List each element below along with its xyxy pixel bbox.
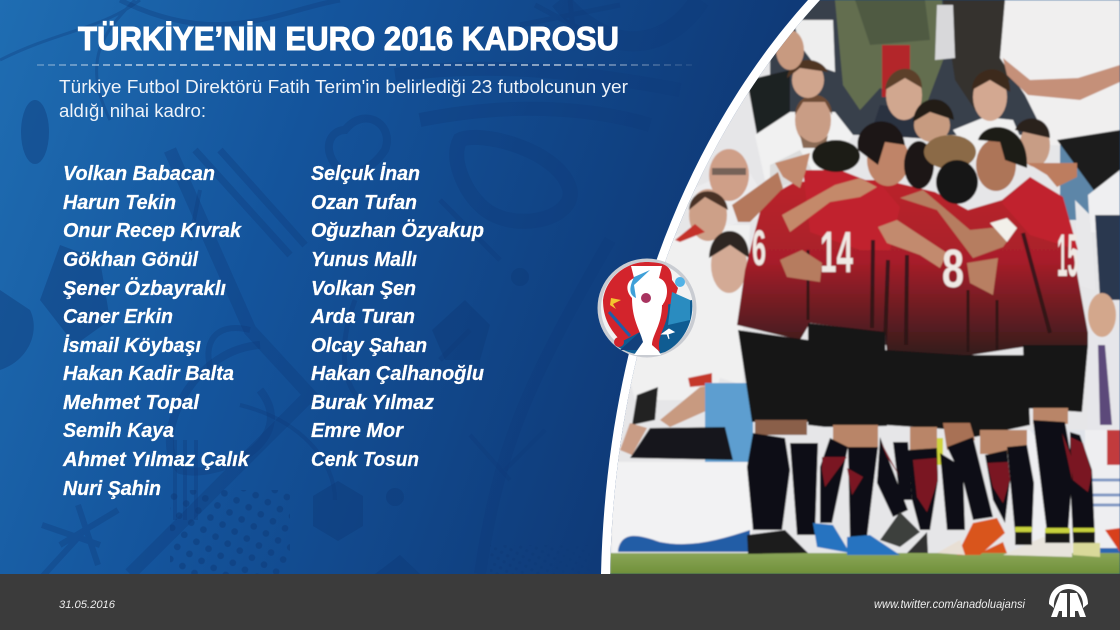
players: shirt numbers [752, 228, 1078, 289]
dashed divider [37, 64, 692, 66]
players: shirt numbers: 14 [820, 220, 853, 285]
player list: left column: Şener Özbayraklı [63, 277, 226, 300]
players: legs and socks [747, 408, 1095, 540]
title: TÜRKİYE’NİN EURO 2016 KADROSU [78, 20, 619, 57]
players: shirt numbers: 8 [942, 239, 964, 299]
player list: left column: Onur Recep Kıvrak [63, 220, 242, 242]
player list: right column: Cenk Tosun [311, 449, 419, 471]
player list: right column: Burak Yılmaz [311, 392, 434, 414]
player list: right column: Ozan Tufan [311, 192, 417, 214]
players: jerseys [737, 170, 1088, 356]
player list: left column: Harun Tekin [63, 192, 176, 214]
player list: right column: Emre Mor [311, 420, 404, 442]
player list: right column: Arda Turan [310, 306, 415, 328]
player list: right column: Olcay Şahan [311, 335, 427, 357]
player list: left column [62, 163, 250, 500]
player list: left column: Volkan Babacan [63, 163, 215, 185]
icon: Anadolu Agency logo [1049, 584, 1088, 617]
player list: left column: Gökhan Gönül [63, 249, 198, 271]
jersey straps and folds [808, 233, 1050, 352]
player list: right column: Hakan Çalhanoğlu [311, 363, 484, 385]
intro text: aldığı nihai kadro: [59, 101, 206, 121]
spectators in the stands [620, 0, 1120, 463]
intro text: Türkiye Futbol Direktörü Fatih Terim'in belirlediği 23 futbolcunun yer [59, 77, 628, 97]
white curved band [601, 0, 820, 574]
players: shirt numbers: 0 [955, 377, 971, 408]
date: 31.05.2016 [59, 599, 116, 611]
background panel [0, 0, 820, 590]
footer bar [0, 574, 1120, 630]
players: boots [747, 512, 1120, 557]
player list: right column: Volkan Şen [311, 278, 416, 300]
photo: Turkish team huddle in front of the crowd [600, 0, 1120, 574]
player list: left column: Hakan Kadir Balta [63, 363, 234, 385]
decorative tournament pattern [0, 0, 700, 590]
sponsor boards and grass [610, 430, 1120, 574]
player list: right column [310, 162, 484, 471]
player list: left column: Ahmet Yılmaz Çalık [62, 449, 250, 471]
players: shirt numbers: 15 [1022, 372, 1046, 397]
twitter url: www.twitter.com/anadoluajansi [874, 599, 1025, 611]
icon: UEFA Euro 2016 logo [598, 258, 696, 358]
player list: right column: Selçuk İnan [311, 162, 420, 185]
player list: left column: Caner Erkin [63, 306, 173, 328]
player list: right column: Oğuzhan Özyakup [311, 219, 484, 242]
player list: left column: Semih Kaya [63, 420, 174, 442]
player list: left column: İsmail Köybaşı [63, 334, 201, 357]
intro text [59, 77, 628, 121]
dark gaps in the stands [769, 0, 1038, 136]
players: shorts [738, 323, 1088, 437]
players: arms and heads [732, 121, 1077, 295]
player list: left column: Nuri Şahin [63, 478, 161, 500]
players: shirt numbers: 6 [752, 220, 766, 276]
player list: right column: Yunus Mallı [311, 249, 417, 271]
player list: left column: Mehmet Topal [63, 392, 199, 414]
